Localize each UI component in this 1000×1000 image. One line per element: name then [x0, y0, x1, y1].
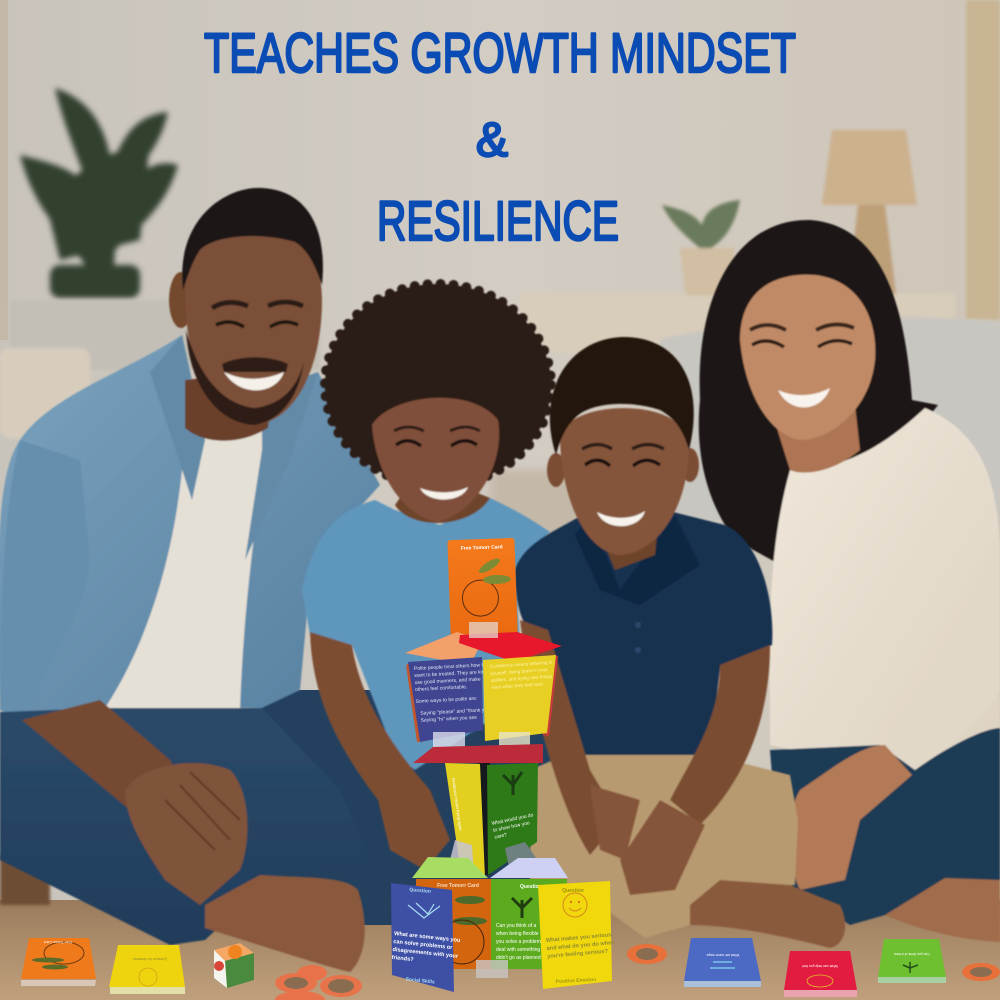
question card: positive emotion: Positive Emotion	[556, 977, 596, 985]
left plant	[20, 88, 178, 298]
floor	[0, 900, 1000, 1000]
boy's hands	[590, 785, 705, 895]
tower: blue card: Saying "hi" when you see	[421, 715, 477, 724]
father's shirt	[0, 335, 380, 722]
tower: top orange card: Free Tomorr Card	[461, 544, 503, 552]
question card: social skills: can solve problems or	[393, 939, 453, 951]
woman's smile	[778, 388, 830, 407]
tower: base green card: Can you think of a	[496, 923, 537, 929]
father's hands	[125, 763, 247, 905]
tower: yellow card: yourself, being brave in your	[490, 667, 549, 676]
tower: base orange card	[416, 879, 491, 969]
boy's polo shirt	[515, 510, 772, 755]
father's foot	[205, 875, 365, 972]
question card: social skills: Question	[409, 887, 431, 895]
title	[204, 21, 796, 252]
tower: middle green card: to show how you	[493, 820, 531, 834]
floor tokens	[275, 944, 1000, 1000]
boy's ears	[547, 448, 699, 487]
beard	[186, 330, 304, 425]
floor card pile: orange: Free Tomorr Card	[44, 940, 72, 944]
person: woman	[699, 220, 1000, 942]
tower: middle green card	[487, 763, 538, 875]
father's neck	[185, 370, 275, 441]
title: RESILIENCE	[377, 189, 619, 252]
girl's shirt	[302, 498, 550, 770]
father's forearm	[22, 700, 190, 830]
woman's sweater	[770, 408, 1000, 775]
floor card pile: yellow	[109, 945, 185, 994]
question card: positive emotion: Question	[562, 888, 584, 894]
question card: positive emotion: you're feeling serious?	[547, 949, 609, 960]
father's hair	[182, 188, 323, 290]
boy's polo buttons	[635, 622, 641, 653]
woman's face	[740, 275, 875, 440]
question card: positive emotion	[538, 881, 616, 989]
tower: base green card: when being flexible	[496, 931, 539, 937]
girl's face	[372, 398, 499, 522]
tower: blue card: others feel comfortable.	[415, 684, 467, 693]
father's ear	[169, 272, 193, 328]
floor card pile: blue: What are some ways	[706, 953, 739, 957]
right sofa	[660, 318, 1000, 520]
floor card pile: green: Can you think of a time	[894, 952, 930, 956]
tower: lime flat card	[412, 857, 488, 878]
clear stand left	[448, 840, 474, 876]
tower: blue card: use good manners, and make	[415, 677, 481, 686]
clear stand right	[505, 842, 536, 872]
table lamp	[822, 130, 917, 294]
tower: top orange card	[447, 538, 518, 636]
tower: middle green card: care?	[494, 832, 508, 841]
girl's smile	[420, 487, 468, 500]
tower: base green card: Question	[520, 884, 542, 890]
tower: middle green card: What would you do	[491, 812, 534, 827]
tower: yellow card: even when they feel hard.	[491, 681, 544, 690]
boy's foot	[690, 880, 845, 948]
dice	[214, 943, 254, 988]
gap between middle cards	[478, 763, 490, 875]
tower: lilac flat card	[490, 858, 568, 878]
boy's hair	[550, 337, 694, 455]
shadowed lap area	[260, 690, 560, 925]
tower: yellow card: Confidence means believing in	[490, 660, 553, 669]
woman's foot	[885, 878, 1000, 942]
girl's neck	[395, 490, 490, 523]
woman's hand	[789, 745, 912, 890]
boy's trousers	[530, 755, 798, 938]
woman's neck	[768, 400, 860, 473]
small plant in pot	[662, 200, 740, 295]
tower: base green card: deal with something	[496, 947, 540, 953]
tower: yellow card	[483, 655, 558, 741]
boy's face	[560, 408, 688, 555]
tower: middle yellow card	[445, 763, 485, 877]
tower: base orange card: Free Tomorr Card	[437, 883, 479, 889]
boy's eyes	[582, 444, 664, 449]
tower: middle yellow card: Resilience means trying again	[451, 777, 463, 831]
title: &	[476, 114, 508, 167]
question card: social skills: Social Skills	[405, 976, 435, 986]
clear clip	[469, 622, 498, 638]
floor card pile: red: What can help you feel	[802, 964, 838, 968]
woman's hair	[699, 220, 938, 570]
question card: social skills: friends?	[391, 955, 414, 963]
tower: blue card: Some ways to be polite are:	[416, 696, 477, 705]
tower: yellow card: abilities, and trying new things	[491, 674, 553, 683]
girl's eyes	[394, 427, 480, 431]
question card: social skills: What are some ways you	[394, 931, 461, 944]
boy's smile	[597, 511, 645, 526]
boy's collar	[575, 515, 700, 605]
left sofa	[0, 300, 320, 438]
girl's hair	[325, 284, 551, 486]
shirt collar and placket	[150, 335, 318, 560]
curtain	[966, 0, 1000, 320]
tower: blue card: want to be treated. They are kind,	[414, 669, 489, 679]
floor card pile: yellow: Question for kindness	[133, 957, 167, 961]
father's face	[185, 228, 322, 425]
person: girl	[302, 284, 551, 870]
tower: blue card	[406, 657, 494, 742]
question card: social skills: disagreements with your	[392, 947, 459, 960]
card tower	[391, 538, 616, 992]
woman's jeans	[770, 728, 1000, 925]
tower: base green card	[491, 879, 567, 969]
clear clips	[433, 732, 465, 752]
floor card pile: red	[784, 951, 857, 997]
tower: blue card: Polite people treat others how they	[414, 662, 491, 672]
wall shelf	[520, 293, 955, 353]
tower: base green card: you solve a problem	[496, 939, 541, 945]
tower: peach flat card	[405, 632, 483, 665]
tower: blue card: Saying "please" and "thank you"	[420, 707, 492, 717]
question card: social skills	[391, 883, 461, 992]
girl's arm	[310, 632, 450, 870]
clear base clip	[476, 960, 508, 978]
woman's eyes	[750, 324, 854, 330]
tower: crimson flat card	[413, 744, 543, 763]
boy's arm	[520, 620, 620, 855]
tower: base green card: didn't go as planned	[496, 955, 541, 961]
tower: red flat card	[459, 632, 562, 662]
jeans	[0, 708, 370, 945]
question card: positive emotion: and what do you do when	[546, 940, 616, 952]
white t-shirt	[105, 425, 265, 710]
question card: positive emotion: What makes you serious,	[546, 932, 614, 944]
father's eyes	[212, 302, 303, 308]
floor card pile: green	[878, 939, 946, 983]
person: boy	[515, 337, 845, 948]
floor card pile: orange	[21, 938, 96, 986]
person: father	[0, 188, 380, 972]
floor card pile: blue	[684, 938, 761, 987]
boy's neck	[590, 505, 660, 570]
father's smile	[224, 372, 284, 390]
title: TEACHES GROWTH MINDSET	[204, 21, 796, 84]
